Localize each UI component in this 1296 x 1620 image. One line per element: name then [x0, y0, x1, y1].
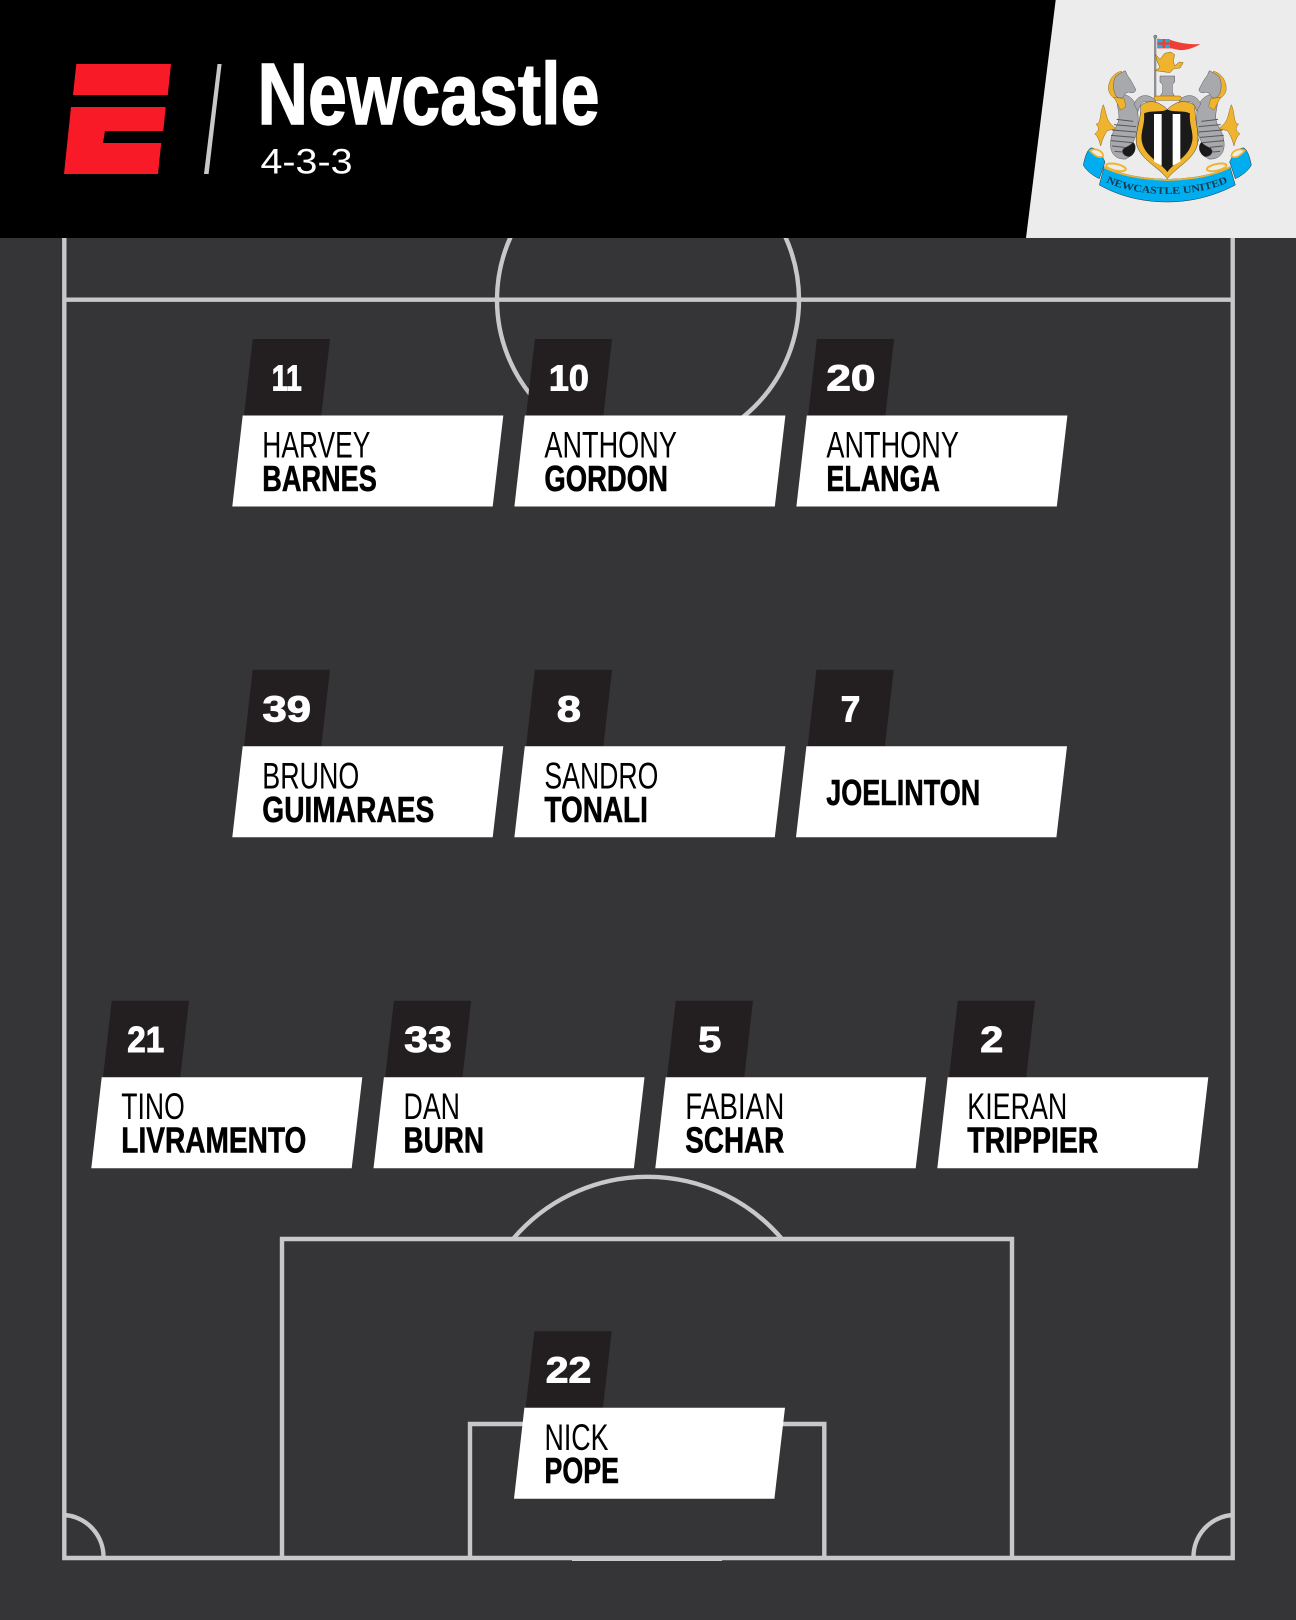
player: 11 Harvey Barnes [232, 339, 503, 506]
player: 5 Fabian Schar: FABIAN [685, 1086, 784, 1127]
player: 5 Fabian Schar: SCHAR [685, 1119, 784, 1160]
shield black [1141, 109, 1193, 172]
player: 21 Tino Livramento [91, 1001, 362, 1168]
player: 33 Dan Burn: 33 [404, 1019, 452, 1060]
crest panel [1026, 0, 1296, 238]
player: 10 Anthony Gordon [514, 339, 785, 506]
player: 39 Bruno Guimaraes: BRUNO [262, 755, 359, 796]
rope [1154, 96, 1181, 100]
flag [1154, 35, 1200, 97]
player: 2 Kieran Trippier: TRIPPIER [967, 1119, 1098, 1160]
player: 11 Harvey Barnes: 11 [272, 358, 302, 399]
ribbon knots [1106, 162, 1126, 173]
header bar [0, 0, 1296, 238]
player: 20 Anthony Elanga: ANTHONY [826, 425, 959, 466]
player: 10 Anthony Gordon: 10 [549, 358, 589, 399]
player: 21 Tino Livramento: 21 [127, 1019, 164, 1060]
player: 39 Bruno Guimaraes: GUIMARAES [262, 789, 434, 830]
player: 2 Kieran Trippier: KIERAN [967, 1086, 1067, 1127]
ribbon band [1099, 167, 1235, 202]
player: 7 Joelinton: 7 [841, 688, 860, 729]
left seahorse [1095, 71, 1157, 159]
player: 8 Sandro Tonali [514, 670, 785, 837]
player: 22 Nick Pope [514, 1331, 785, 1499]
player: 11 Harvey Barnes: HARVEY [262, 425, 370, 466]
formation: 4-3-3 [260, 142, 352, 182]
icon: Newcastle United crest [1083, 34, 1252, 202]
ribbon tails [1083, 148, 1105, 179]
player: 39 Bruno Guimaraes: 39 [263, 688, 311, 729]
player: 20 Anthony Elanga [796, 339, 1067, 506]
player: 8 Sandro Tonali: TONALI [544, 789, 648, 830]
player: 33 Dan Burn [374, 1001, 644, 1168]
shield white stripes [1154, 114, 1162, 166]
right seahorse [1177, 71, 1240, 159]
player: 11 Harvey Barnes: BARNES [262, 458, 377, 499]
icon: Newcastle United crest: NEWCASTLE UNITED [1106, 176, 1226, 194]
player: 8 Sandro Tonali: 8 [557, 688, 581, 729]
slash divider [204, 64, 222, 174]
player: 10 Anthony Gordon: GORDON [544, 458, 668, 499]
pitch markings [64, 149, 1233, 1561]
shield gold [1136, 102, 1198, 179]
player: 2 Kieran Trippier: 2 [980, 1019, 1003, 1060]
player: 21 Tino Livramento: TINO [121, 1086, 185, 1127]
ribbon text [1106, 182, 1229, 194]
player: 20 Anthony Elanga: 20 [826, 358, 875, 399]
player: 8 Sandro Tonali: SANDRO [544, 755, 658, 796]
player: 33 Dan Burn: BURN [404, 1119, 484, 1160]
lion [1155, 52, 1183, 73]
player: 7 Joelinton [796, 670, 1067, 837]
player: 39 Bruno Guimaraes [232, 670, 503, 837]
player: 5 Fabian Schar [655, 1001, 926, 1168]
player: 20 Anthony Elanga: ELANGA [826, 458, 940, 499]
player: 10 Anthony Gordon: ANTHONY [544, 425, 677, 466]
icon: ESPN logo E [64, 64, 171, 174]
player: 22 Nick Pope: 22 [546, 1350, 591, 1391]
player: 22 Nick Pope: POPE [544, 1450, 619, 1491]
player: 21 Tino Livramento: LIVRAMENTO [121, 1119, 306, 1160]
tower [1160, 76, 1175, 97]
title: Newcastle [258, 46, 600, 143]
player: 7 Joelinton: JOELINTON [826, 772, 980, 813]
player: 33 Dan Burn: DAN [404, 1086, 460, 1127]
player: 22 Nick Pope: NICK [544, 1417, 609, 1458]
player: 5 Fabian Schar: 5 [698, 1019, 721, 1060]
player: 2 Kieran Trippier [937, 1001, 1208, 1168]
